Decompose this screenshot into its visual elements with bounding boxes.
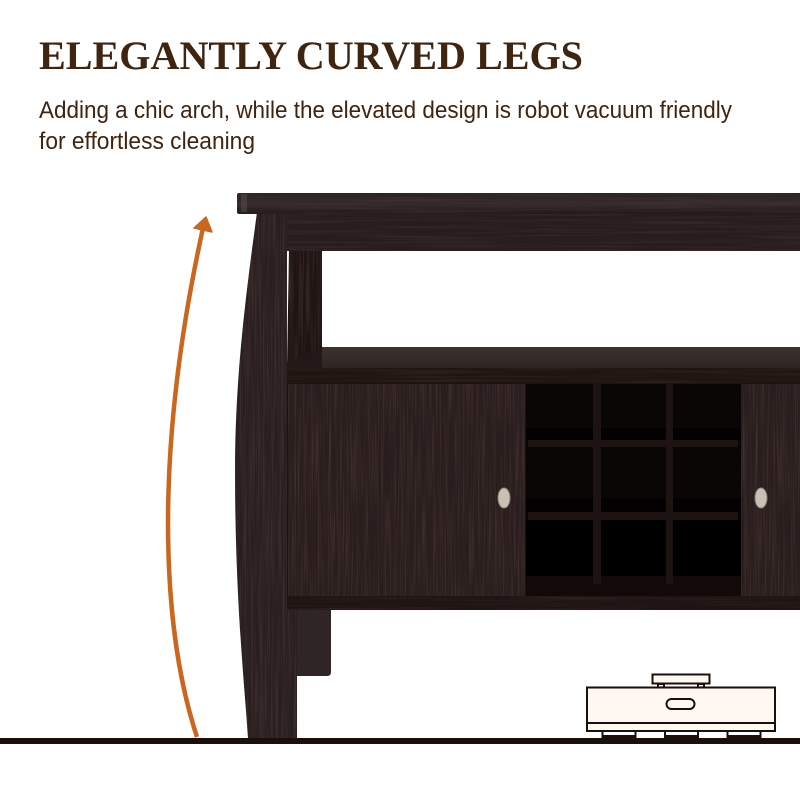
left door handle — [498, 488, 510, 508]
furniture: console cabinet — [235, 193, 800, 738]
title: ELEGANTLY CURVED LEGS — [39, 33, 583, 78]
front left curved leg — [235, 212, 297, 738]
icon: height arrow — [168, 217, 212, 737]
shelf lit surface — [322, 347, 800, 368]
cabinet backing — [286, 364, 800, 610]
bottom rail — [287, 596, 800, 610]
left door — [288, 384, 525, 596]
tabletop — [237, 193, 800, 214]
tabletop end highlight — [241, 194, 247, 212]
description text: for effortless cleaning — [39, 128, 255, 155]
apron — [285, 214, 800, 251]
apron backing — [285, 212, 800, 251]
back leg lower — [296, 608, 331, 676]
floor line — [0, 738, 800, 744]
description text: Adding a chic arch, while the elevated design is robot vacuum friendly — [39, 97, 732, 124]
shelf front — [287, 368, 800, 383]
back leg upper — [287, 250, 322, 368]
description text — [39, 97, 732, 155]
shelf top surface — [287, 347, 800, 368]
right door — [741, 384, 800, 596]
cubby storage — [526, 384, 741, 596]
right door handle — [755, 488, 767, 508]
icon: robot vacuum — [587, 674, 775, 738]
